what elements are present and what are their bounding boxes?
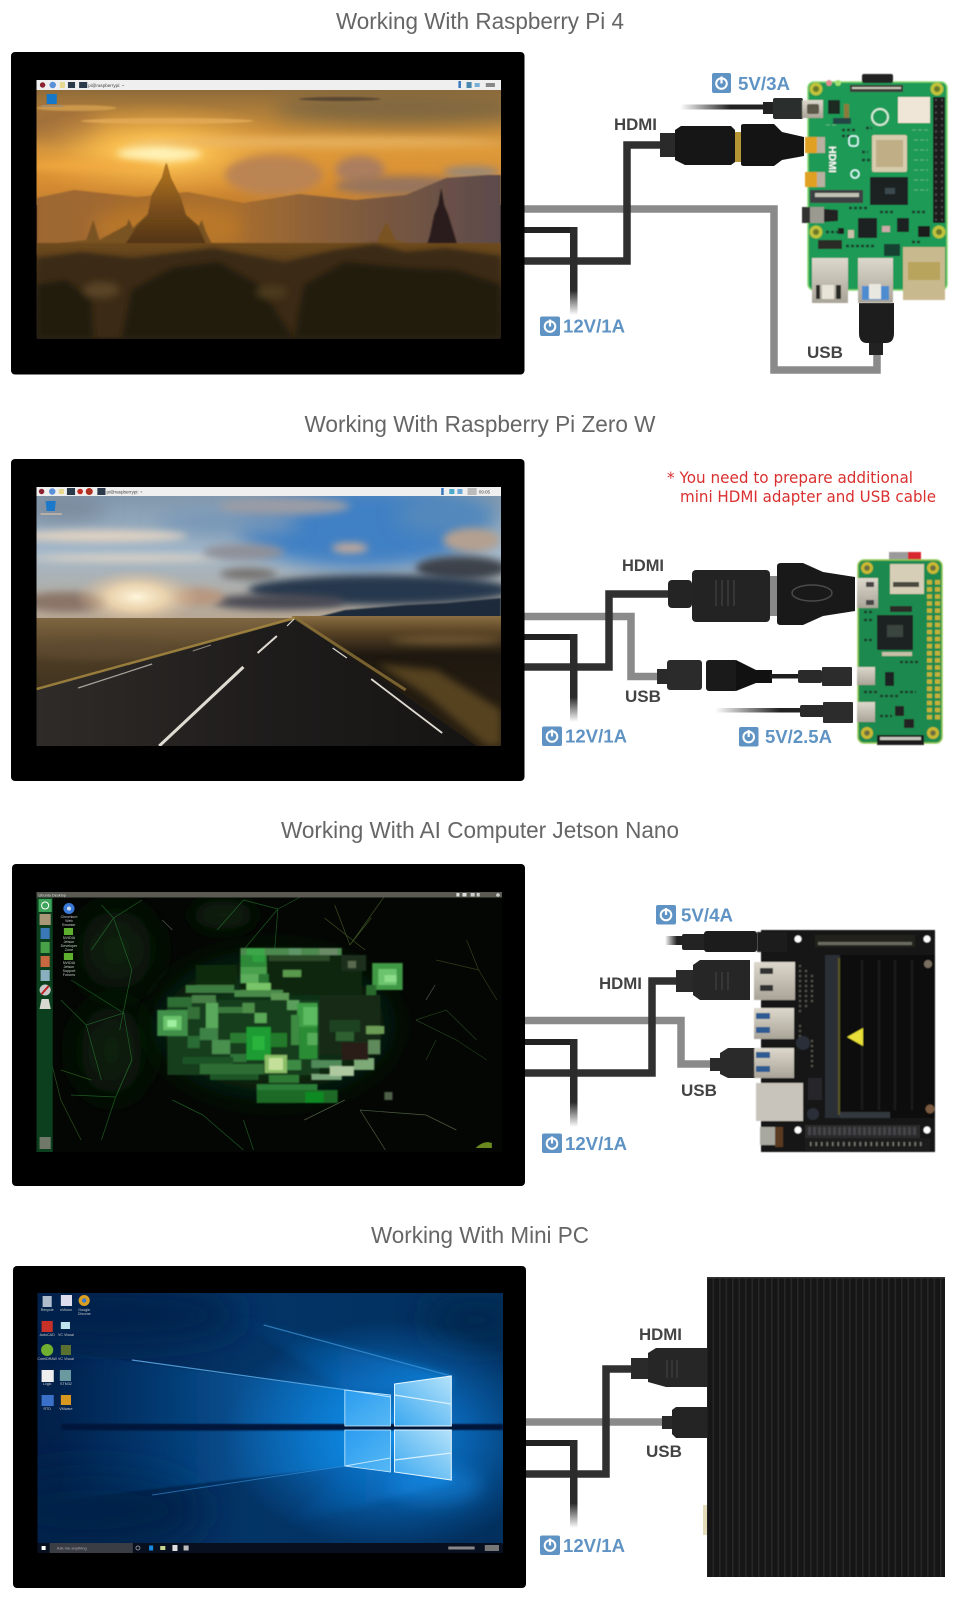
- cable: HDMI black: [524, 1369, 635, 1474]
- note: additional adapter required: [667, 468, 936, 506]
- label: HDMI: HDMI: [599, 974, 642, 993]
- mini PC: black ribbed case: [703, 1277, 945, 1577]
- screen image: pagoda sunset: [36, 80, 501, 339]
- plug: HDMI adapter: [660, 124, 804, 166]
- cable: HDMI black: [524, 145, 664, 261]
- plug: USB-A cable: [859, 303, 894, 355]
- label: 5V/4A: 5V/4A: [681, 904, 733, 926]
- desktop icons: Web: [65, 919, 73, 923]
- cable: HDMI black: [524, 594, 672, 667]
- desktop icons: Chromium: [61, 915, 77, 919]
- desktop icons: Zone: [65, 948, 73, 952]
- desktop icon: trash: [42, 94, 63, 107]
- label: USB: USB: [625, 687, 661, 706]
- label: USB: USB: [646, 1442, 682, 1461]
- monitor: road desktop: [11, 459, 524, 781]
- title: Raspberry Pi 4: Working With Raspberry Pi 4: [336, 8, 624, 34]
- screen image: desert road: [15, 487, 512, 746]
- desktop icons: Support: [63, 969, 75, 973]
- label: HDMI: HDMI: [639, 1325, 682, 1344]
- desktop icons: RTD: [43, 1407, 51, 1411]
- desktop icons: [61, 903, 78, 977]
- desktop icons: uVision: [60, 1308, 72, 1312]
- desktop icons: VMware: [59, 1407, 73, 1411]
- taskbar: pi@raspberrypi: ~: [106, 490, 143, 494]
- label: 12V/1A: 12V/1A: [563, 316, 625, 336]
- plug: DC barrel power: [665, 931, 757, 952]
- label: 5V/4A: [656, 904, 733, 926]
- cable: USB gray: [524, 616, 662, 676]
- label: 12V/1A: 12V/1A: [563, 1535, 625, 1556]
- plug: HDMI adapter: [668, 563, 855, 625]
- desktop icons: Jetson: [64, 965, 74, 969]
- desktop icons: Developer: [61, 944, 78, 948]
- plug: USB: [662, 1407, 707, 1438]
- label: 5V/2.5A: 5V/2.5A: [765, 726, 832, 747]
- Windows logo: [345, 1376, 451, 1480]
- label: 12V/1A: 12V/1A: [565, 726, 627, 746]
- board label: HDMI: [826, 146, 838, 173]
- warning triangle: [847, 1028, 863, 1046]
- plug: USB OTG adapter: [657, 660, 852, 691]
- taskbar: pi@raspberrypi: ~: [88, 83, 125, 88]
- desktop icons: Recycle: [41, 1308, 54, 1312]
- GPIO header: [805, 1125, 920, 1138]
- desktop icons: [37, 1295, 91, 1411]
- cable: 12V power: [524, 634, 578, 722]
- board: Raspberry Pi Zero W: [857, 552, 942, 745]
- desktop icons: CorelDRAW: [37, 1357, 58, 1361]
- board: Jetson Nano: [754, 930, 935, 1152]
- desktop icons: Jetson: [64, 940, 74, 944]
- plug: HDMI: [631, 1348, 707, 1387]
- screen image: green NVIDIA wallpaper: [37, 892, 502, 1152]
- desktop icons: STM32: [60, 1382, 72, 1386]
- desktop icons: Logic: [43, 1382, 52, 1386]
- label: 5V/3A: 5V/3A: [738, 73, 790, 94]
- taskbar: Ask me anything: [57, 1546, 87, 1550]
- monitor: sunset desktop: [11, 52, 538, 374]
- title: Mini PC: Working With Mini PC: [371, 1222, 589, 1248]
- cable: 12V power: [524, 227, 578, 315]
- monitor: Windows desktop: [0, 1266, 558, 1588]
- note: additional adapter required: mini HDMI adapter and USB cable: [680, 487, 936, 506]
- label: USB: USB: [807, 343, 843, 362]
- label: 12V/1A: 12V/1A: [565, 1133, 627, 1154]
- plug: micro USB power: [715, 702, 853, 723]
- label: 5V/3A: [712, 73, 790, 94]
- label: HDMI: HDMI: [614, 115, 657, 134]
- desktop icons: VC Visual: [58, 1357, 74, 1361]
- desktop icon: trash: [41, 501, 62, 515]
- plug: HDMI: [676, 960, 750, 1000]
- cable: HDMI black: [524, 981, 680, 1073]
- cable: USB gray: [524, 209, 877, 370]
- desktop icons: AutoCAD: [40, 1333, 55, 1337]
- screen image: Windows 10 wallpaper: [38, 1293, 503, 1553]
- taskbar: [38, 1543, 503, 1553]
- board: Raspberry Pi 4: [802, 74, 947, 303]
- desktop icons: NVIDIA: [63, 961, 76, 965]
- plug: USB: [710, 1048, 755, 1078]
- taskbar: [37, 487, 501, 496]
- desktop icons: Google: [78, 1308, 90, 1312]
- pixel mosaic: NVIDIA eye logo: [157, 948, 403, 1103]
- taskbar: 09:05: [479, 490, 491, 494]
- panel: Mini PC setup: [0, 1266, 945, 1588]
- cable: USB gray: [524, 1418, 665, 1426]
- title: Jetson Nano: Working With AI Computer Jetson Nano: [281, 817, 679, 843]
- NVIDIA mark: [476, 1142, 492, 1148]
- cable: USB gray: [524, 1020, 712, 1064]
- desktop icons: Browser: [62, 923, 76, 927]
- panel: Jetson Nano setup: [12, 864, 935, 1186]
- taskbar: Ubuntu Desktop: [39, 894, 66, 897]
- panel: Raspberry Pi 4 setup: [11, 52, 947, 374]
- cable: 12V power: [524, 1039, 578, 1127]
- taskbar: [37, 80, 501, 90]
- taskbar: [37, 892, 502, 898]
- cable: 12V power: [524, 1440, 578, 1528]
- desktop icons: Chrome: [78, 1312, 91, 1316]
- panel: Raspberry Pi Zero W setup: [11, 459, 942, 781]
- monitor: NVIDIA desktop: [12, 864, 525, 1186]
- label: USB: USB: [681, 1081, 717, 1100]
- desktop icons: NVIDIA: [63, 936, 76, 940]
- launcher dock: [37, 898, 53, 1152]
- desktop icons: VC Visual: [58, 1333, 74, 1337]
- desktop icons: Forums: [63, 973, 75, 977]
- note: additional adapter required: * You need to prepare additional: [667, 468, 913, 487]
- label: HDMI: HDMI: [622, 556, 664, 575]
- title: Raspberry Pi Zero W: Working With Raspberry Pi Zero W: [304, 411, 656, 437]
- plug: USB-C power cable: [680, 98, 803, 119]
- heatsink: [825, 955, 935, 1118]
